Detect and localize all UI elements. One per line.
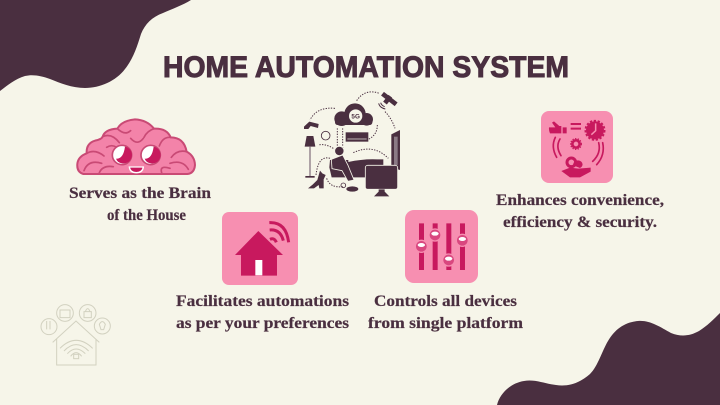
clock [321,131,330,140]
title: HOME AUTOMATION SYSTEM [163,51,569,84]
icon: smiling brain [77,119,195,174]
text: enhances convenience: Enhances convenience, [496,192,664,209]
text: enhances convenience: efficiency & security. [503,214,657,231]
panel: smart home icon [222,212,298,285]
text: facilitates automations [176,293,349,332]
monitor [365,165,398,196]
clock gear [585,121,605,140]
panel: sliders icon [405,210,478,283]
text: controls all devices: from single platform [368,315,523,332]
wall display [391,130,400,170]
air conditioner [346,132,368,142]
dashed connections [310,92,395,187]
top-left blob [0,0,191,91]
sofa [329,159,383,177]
floor lamp [305,136,315,178]
text: serves as the brain: of the House [107,207,186,224]
house [235,231,283,276]
icon: smart home scene [304,92,400,196]
wifi arcs [269,223,289,242]
hand with coins [561,158,591,177]
text: enhances convenience [496,192,664,231]
equals bars [571,123,581,130]
dog [308,171,326,188]
text: facilitates automations: as per your preferences [176,315,349,332]
robot vacuum [346,186,358,192]
text: facilitates automations: Facilitates automations [176,293,349,310]
mouth [129,167,143,173]
icon: faint smart home wifi [41,305,110,365]
text: controls all devices [368,293,523,332]
small gear [571,139,581,149]
bottom-right blob [497,313,720,405]
cloud with 5G: 5G [351,113,360,120]
text: serves as the brain: Serves as the Brain [69,185,211,202]
panel: convenience icon [541,111,613,183]
satellite [379,92,398,109]
camera [304,122,319,129]
text: controls all devices: Controls all devices [374,293,517,310]
arcs [553,137,603,165]
text: serves as the brain [69,185,211,224]
eyes [112,145,161,165]
person [331,146,354,181]
thumbs up [549,121,567,133]
